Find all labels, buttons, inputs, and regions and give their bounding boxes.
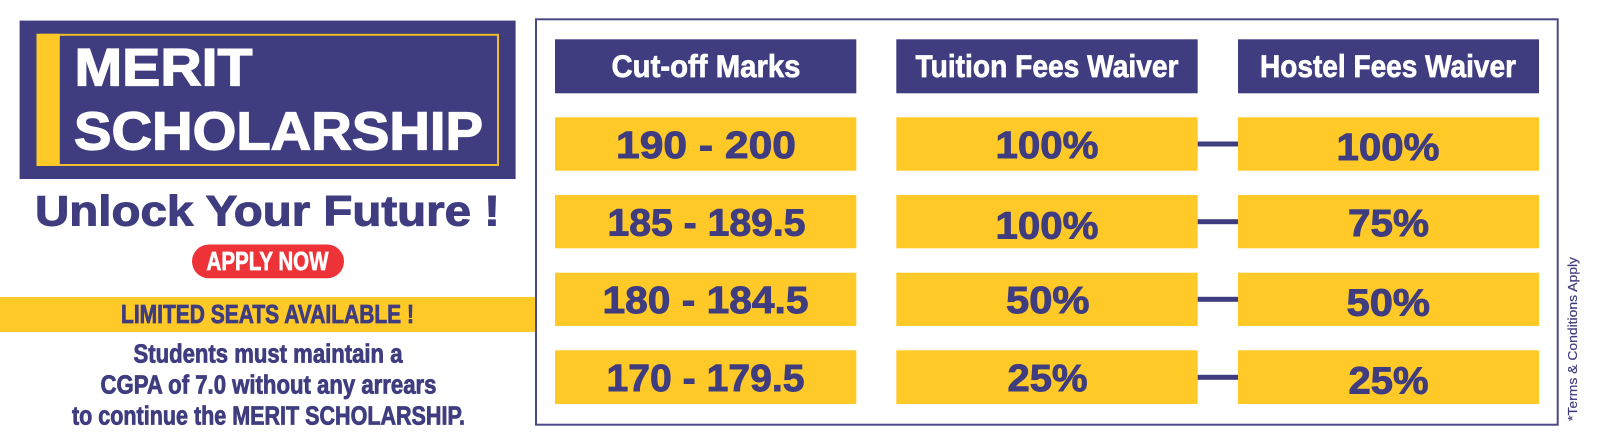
row: 185-189.5: 185 - 189.5 xyxy=(608,202,806,244)
column header: hostel fees waiver xyxy=(1238,39,1539,93)
row: 185-189.5: 100% xyxy=(996,205,1098,247)
column header: cut-off marks: Cut-off Marks xyxy=(612,48,800,84)
row: 185-189.5 xyxy=(555,195,1539,248)
row: 170-179.5: 25% xyxy=(1348,360,1428,402)
column header: hostel fees waiver: Hostel Fees Waiver xyxy=(1260,48,1516,84)
row: 180-184.5: 50% xyxy=(1346,283,1430,325)
row: 190-200 xyxy=(555,117,1539,171)
text block: CGPA condition: CGPA of 7.0 without any arrears xyxy=(100,372,436,400)
panel: scholarship table frame xyxy=(536,19,1558,425)
column header: cut-off marks xyxy=(555,39,856,93)
row: 170-179.5: 170 - 179.5 xyxy=(606,358,804,400)
row: 170-179.5 xyxy=(555,350,1539,404)
panel: merit scholarship title block xyxy=(20,21,516,179)
column header: tuition fees waiver: Tuition Fees Waiver xyxy=(916,48,1178,84)
heading: MERIT: MERIT xyxy=(74,38,253,98)
row: 190-200: 100% xyxy=(1336,127,1440,169)
row: 170-179.5: 25% xyxy=(1008,358,1088,400)
button: apply now xyxy=(192,244,344,278)
row: 180-184.5 xyxy=(555,273,1539,326)
row: 180-184.5: 180 - 184.5 xyxy=(602,280,808,322)
text block: CGPA condition: to continue the MERIT SCHOLARSHIP. xyxy=(72,402,465,430)
column header: tuition fees waiver xyxy=(896,39,1198,93)
text block: CGPA condition xyxy=(72,340,465,430)
footnote: terms and conditions: *Terms & Conditions Apply xyxy=(1566,256,1580,421)
banner: limited seats xyxy=(0,297,535,332)
text block: CGPA condition: Students must maintain a xyxy=(134,340,403,368)
row: 180-184.5: 50% xyxy=(1006,280,1090,322)
button: apply now: APPLY NOW xyxy=(206,248,329,276)
banner: limited seats: LIMITED SEATS AVAILABLE ! xyxy=(121,301,414,329)
row: 190-200: 190 - 200 xyxy=(616,125,796,167)
row: 185-189.5: 75% xyxy=(1348,203,1429,245)
tagline: Unlock Your Future ! xyxy=(35,188,500,236)
heading: SCHOLARSHIP: SCHOLARSHIP xyxy=(74,102,483,162)
row: 190-200: 100% xyxy=(996,125,1098,167)
